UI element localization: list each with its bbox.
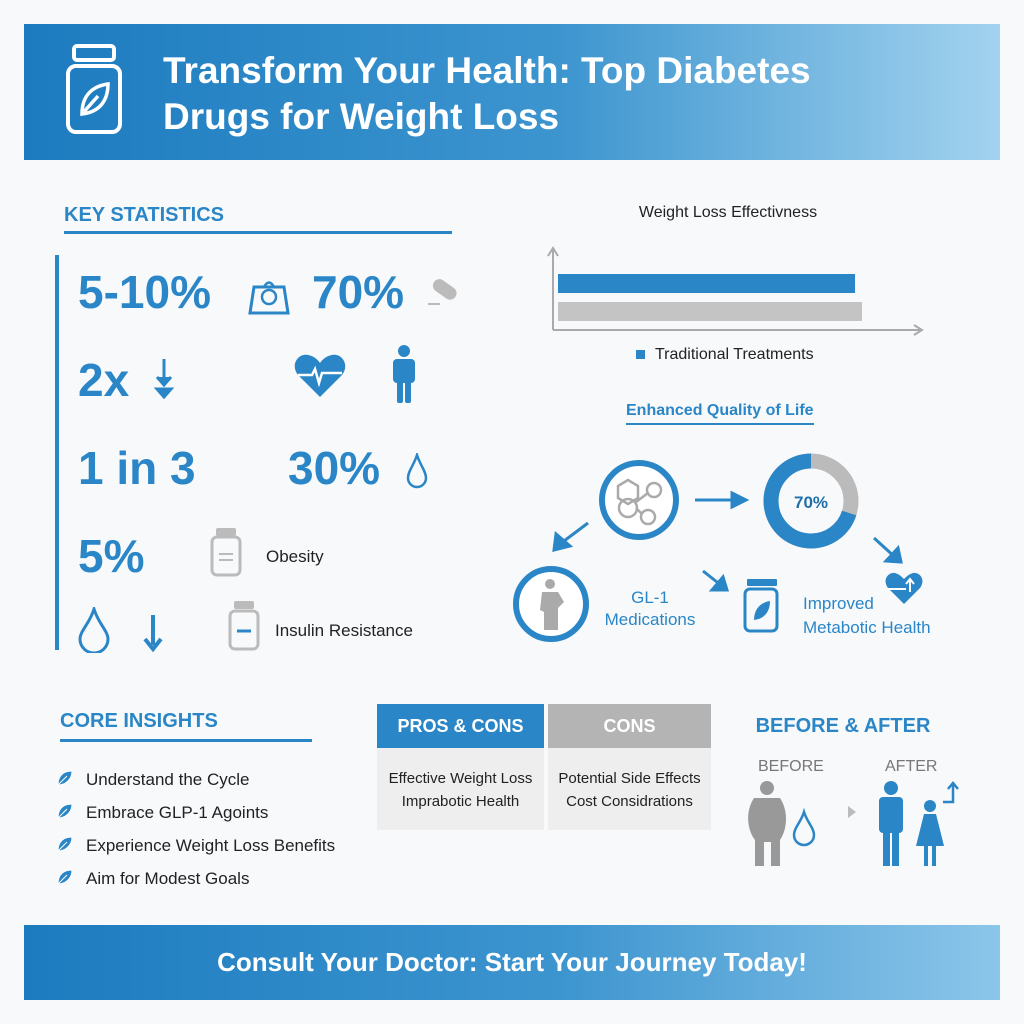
heading: core insights [60,710,312,742]
text: insulin: Insulin Resistance [275,621,413,640]
legend: Traditional Treatments [655,346,814,363]
stats panel: 5% [78,530,144,582]
table: pros and cons: CONS [603,716,656,736]
list: core insights: Understand the Cycle [86,770,249,789]
icon: scale [248,281,290,314]
list: core insights: Aim for Modest Goals [86,869,249,888]
text: obesity: Obesity [266,547,324,566]
arrow down-right [703,571,727,590]
icon: slim person [879,781,903,866]
icon: person circle [516,569,586,639]
footer banner: Consult Your Doctor: Start Your Journey Today! [217,947,807,977]
icon: molecule circle [602,463,676,537]
icon: heart pulse [294,354,346,397]
text: GL-1 medications: GL-1 [631,588,669,607]
icon: bottle gray [210,528,242,576]
flow diagram: Metabotic Health [803,618,931,637]
heading: key statistics: KEY STATISTICS [64,204,224,226]
list: core insights: Experience Weight Loss Benefits [86,836,335,855]
text: improved metabolic health: Improved [803,594,874,613]
icon: down arrow [154,359,174,399]
stats panel: 5-10% [78,266,211,318]
icon: person [393,345,415,403]
table: pros and cons: Potential Side Effects [558,770,701,787]
heading: enhanced quality of life: Enhanced Quality of Life [626,402,814,419]
table: pros and cons [377,704,711,830]
icon: heart up [886,573,922,604]
icon: drop [794,812,814,845]
table: pros and cons: Effective Weight Loss [389,770,532,787]
table: pros and cons: Imprabotic Health [402,793,519,810]
list: core insights: Embrace GLP-1 Agoints [86,803,268,822]
flow diagram: Medications [605,610,695,629]
table: pros and cons: PROS & CONS [397,716,524,736]
stats panel: 30% [288,442,380,494]
before/after illustration: AFTER [885,758,937,775]
icon: drop [406,453,428,488]
stats panel: 1 in 3 [78,442,196,494]
bar chart [547,204,924,363]
before/after illustration [748,758,959,866]
heading: key statistics [64,204,452,234]
table: pros and cons: Cost Considrations [566,793,693,810]
stats panel [78,266,456,653]
donut chart 70%: 70% [794,493,828,512]
icon: pill [428,279,456,305]
heading: before & after: BEFORE & AFTER [756,715,930,737]
list: core insights [58,770,335,888]
bar chart: Weight Loss Effectivness [639,204,817,221]
header banner [24,24,1000,160]
arrow down-right 2 [874,538,901,562]
icon: drop large [78,607,110,653]
icon: arrow down [144,615,162,652]
icon: heavy person [748,781,786,866]
flow diagram [513,454,931,642]
stats panel: 70% [312,266,404,318]
donut chart 70% [771,461,851,541]
icon: bottle minus [228,601,260,650]
footer banner [24,925,1000,1000]
title: Drugs for Weight Loss [163,96,559,137]
icon: jar with leaf [66,44,122,134]
icon: woman [916,800,944,866]
arrow right [695,493,746,507]
title [163,50,811,137]
stats panel: 2x [78,354,129,406]
title: Transform Your Health: Top Diabetes [163,50,811,91]
icon: jar leaf [745,579,777,631]
before/after illustration: BEFORE [758,758,824,775]
arrow down-left [554,523,588,550]
heading: core insights: CORE INSIGHTS [60,710,218,732]
